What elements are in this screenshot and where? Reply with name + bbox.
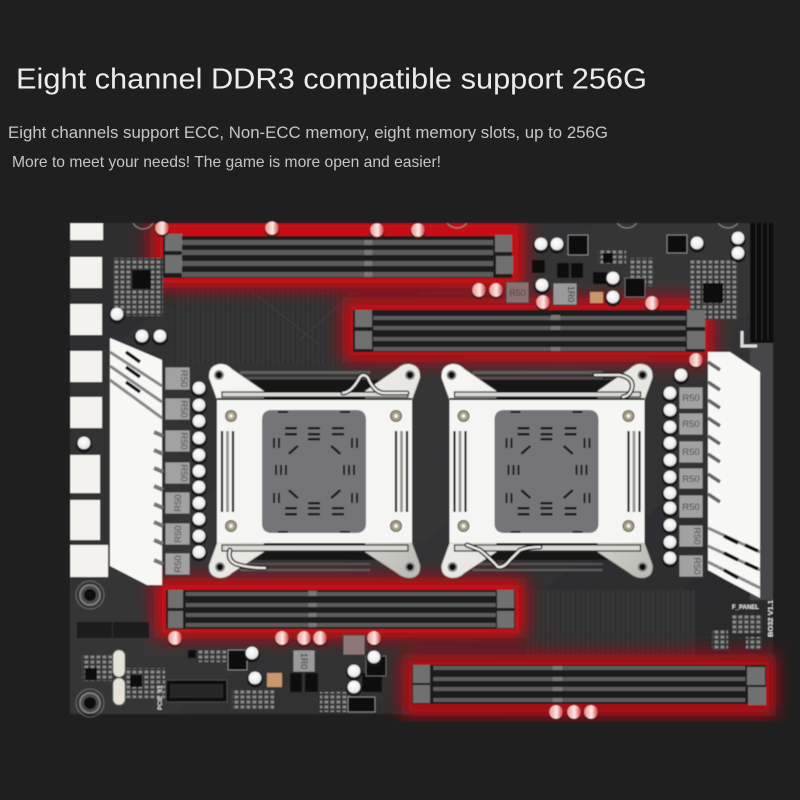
bottom power inductors	[293, 635, 365, 672]
left inductors R50: R50	[178, 432, 189, 450]
right inductors R50: R50	[682, 419, 700, 430]
right inductors R50	[679, 387, 703, 577]
left inductors R50: R50	[178, 464, 189, 482]
subtitle line 1: Eight channels support ECC, Non-ECC memory, eight memory slots, up to 256G	[8, 124, 608, 142]
crystals	[113, 650, 125, 705]
right inductors R50: R50	[682, 447, 700, 458]
left inductors R50: R50	[173, 555, 184, 573]
memory slot C	[166, 590, 515, 629]
right inductors R50: R50	[682, 474, 700, 485]
subtitle line 2: More to meet your needs! The game is more open and easier!	[12, 154, 441, 171]
left capacitors	[76, 308, 207, 562]
memory slot A	[163, 234, 513, 278]
CPU socket left	[209, 364, 420, 578]
top edge mounting arcs	[132, 222, 739, 230]
left inductors R50: R50	[173, 494, 184, 512]
orange chips	[267, 292, 603, 687]
mounting holes	[76, 581, 104, 717]
PCIe x1 slot	[158, 680, 227, 710]
bottom power inductors: 1R0	[299, 653, 309, 669]
left inductors R50: R50	[173, 525, 184, 543]
right capacitors	[662, 368, 689, 568]
PCIe x1 slot: PCIE_X1	[158, 685, 164, 710]
silkscreen labels: F_PANEL	[732, 605, 759, 611]
PCB base	[70, 223, 773, 714]
right VRM heatsink	[708, 352, 760, 598]
silkscreen labels	[732, 600, 775, 637]
right inductors R50: R50	[682, 393, 700, 404]
left inductors R50: R50	[178, 400, 189, 418]
24-pin power connector	[742, 223, 773, 346]
top right power inductors: 1R0	[566, 286, 576, 302]
CPU socket right	[441, 364, 653, 578]
memory slot D	[412, 665, 766, 705]
socket retention levers	[229, 375, 632, 568]
motherboard	[70, 204, 776, 721]
top right power inductors: R50	[509, 288, 526, 298]
rear connectors	[70, 223, 108, 577]
title: Eight channel DDR3 compatible support 256G	[16, 64, 647, 96]
white capacitors on board	[244, 232, 746, 696]
right inductors R50: R50	[691, 557, 702, 575]
top right power inductors	[506, 282, 577, 305]
right inductors R50: R50	[682, 502, 700, 513]
left inductors R50: R50	[178, 370, 189, 387]
right inductors R50: R50	[691, 527, 702, 545]
left inductors R50	[165, 367, 190, 575]
chips	[77, 235, 723, 712]
silkscreen labels: BO32 V1.1	[766, 600, 775, 637]
red lit capacitors	[154, 221, 704, 721]
left VRM heatsink	[110, 338, 163, 585]
memory slot B	[353, 310, 705, 352]
red glow behind memory slots	[150, 216, 776, 716]
small gray pad clusters	[82, 250, 762, 712]
